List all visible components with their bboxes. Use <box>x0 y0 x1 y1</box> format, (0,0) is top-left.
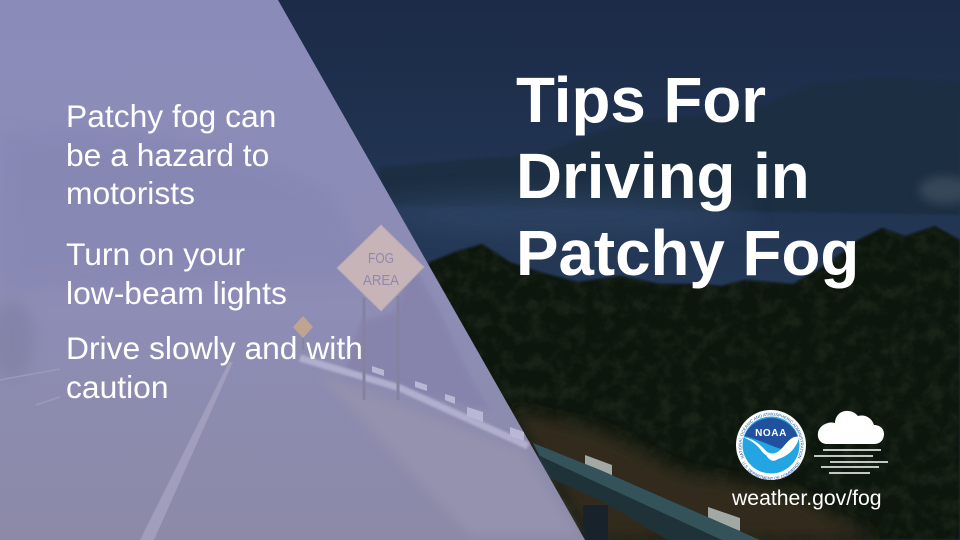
link text: weather.gov/fog <box>731 487 882 510</box>
tip 2: Turn on your <box>66 236 245 272</box>
guardrail seen through panel <box>300 358 528 446</box>
icon: NOAA logo <box>736 410 806 480</box>
faint centre dashes <box>0 369 60 405</box>
tip 1: be a hazard to <box>66 137 269 173</box>
tip 1: Patchy fog can <box>66 98 276 134</box>
title: Tips For <box>516 65 766 136</box>
distant dark hills <box>380 78 960 215</box>
tree foliage texture <box>437 231 960 540</box>
faint trees behind sign <box>345 262 490 410</box>
text block: fog tips <box>66 98 363 405</box>
small distant road sign <box>293 316 313 350</box>
translucent lilac diagonal panel <box>0 0 585 540</box>
faint hill in fog <box>0 128 380 290</box>
fog band in valley <box>370 197 750 233</box>
guardrail beam <box>533 443 760 540</box>
tip 2: low-beam lights <box>66 275 287 311</box>
faint tree at left edge <box>0 300 34 380</box>
road sign: FOG AREA: AREA <box>363 272 399 289</box>
tip 1: motorists <box>66 175 195 211</box>
title: Patchy Fog <box>516 218 859 289</box>
background photo: foggy roadside scene <box>278 0 960 540</box>
icon: NOAA logo: NATIONAL OCEANIC AND ATMOSPHERIC ADMINISTRATION <box>738 412 804 459</box>
guardrail upper posts <box>585 455 740 531</box>
icon: NOAA logo: U.S. DEPARTMENT OF COMMERCE <box>742 462 800 480</box>
icon: fog cloud <box>814 411 888 473</box>
foreground tree mass <box>400 226 960 540</box>
road sign: FOG AREA: FOG <box>368 250 394 267</box>
guardrail lower post <box>583 505 608 540</box>
fog patch on the far hill <box>919 176 960 204</box>
tip 3: Drive slowly and with <box>66 330 363 366</box>
grass bank tone <box>320 375 578 535</box>
road sign: FOG AREA <box>337 225 424 400</box>
title: Driving in <box>516 141 810 212</box>
tip 3: caution <box>66 369 169 405</box>
icon: NOAA logo: NOAA <box>755 428 787 439</box>
dry grass bank <box>510 410 880 540</box>
guardrail posts seen through panel <box>372 366 524 441</box>
faint road edge line <box>140 362 233 540</box>
